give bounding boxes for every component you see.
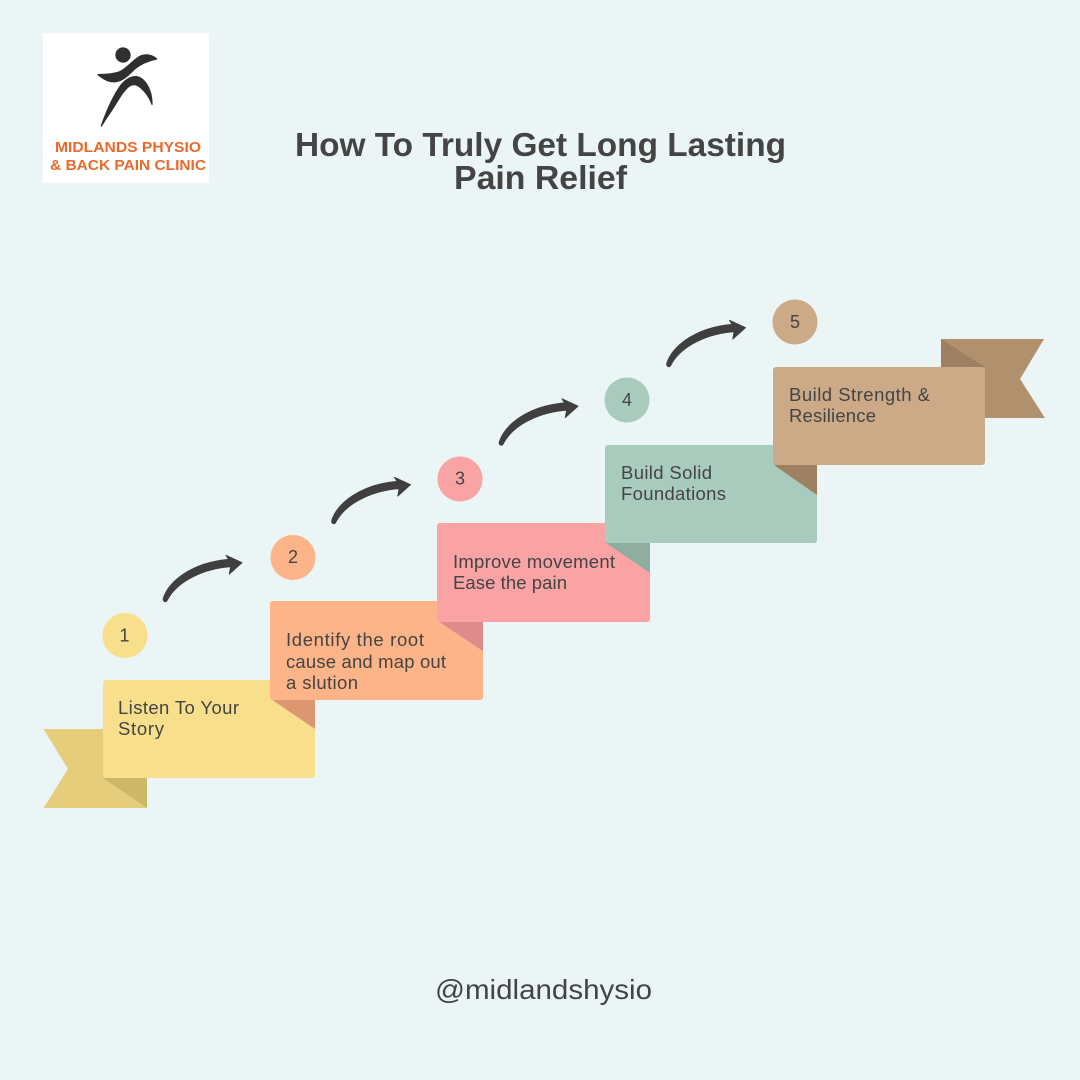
- number badge 1: 1: [119, 626, 130, 646]
- number badge 4: 4: [622, 390, 632, 410]
- number badge 4: [604, 378, 650, 422]
- title: Pain Relief: [454, 160, 628, 197]
- step 4: [604, 378, 817, 573]
- card 5: Resilience: [789, 405, 876, 426]
- card 5: [773, 367, 985, 465]
- logo text: MIDLANDS PHYSIO: [55, 140, 201, 156]
- number badge 2: [270, 535, 316, 580]
- card 1: Listen To Your: [118, 697, 239, 718]
- title: [295, 127, 786, 197]
- step 3: [437, 456, 650, 651]
- fold 5: [774, 465, 817, 495]
- step 5: [772, 300, 985, 495]
- ribbon tail: left yellow: [44, 729, 147, 808]
- card 1: [103, 680, 315, 778]
- logo text: [50, 140, 207, 174]
- arrow 1 to 2: [163, 555, 242, 602]
- footer handle: @midlandshysio: [435, 974, 652, 1005]
- card 2: [270, 601, 483, 700]
- card 3: [437, 523, 650, 622]
- number badge 5: 5: [790, 312, 800, 332]
- arrow 2 to 3: [332, 477, 410, 524]
- title: How To Truly Get Long Lasting: [295, 127, 786, 164]
- card 4: [605, 445, 817, 543]
- number badge 5: [772, 300, 818, 344]
- icon: running figure: [98, 48, 157, 126]
- ribbon tail: right tan: [941, 339, 1045, 418]
- card 3: Ease the pain: [453, 572, 567, 593]
- arrow 3 to 4: [499, 399, 578, 445]
- card 2: cause and map out: [286, 651, 446, 672]
- card 3: Improve movement: [453, 551, 615, 572]
- card 2: a slution: [286, 672, 358, 693]
- card 2: Identify the root: [286, 629, 424, 650]
- card 4: Build Solid: [621, 462, 712, 483]
- number badge 2: 2: [288, 547, 298, 567]
- card 5: Build Strength &: [789, 384, 931, 405]
- logo: [43, 33, 209, 183]
- step 2: [270, 535, 483, 729]
- logo text: & BACK PAIN CLINIC: [50, 158, 207, 174]
- fold 4: [606, 543, 650, 573]
- card 1: Story: [118, 718, 165, 739]
- number badge 1: [102, 613, 148, 658]
- arrow 4 to 5: [667, 320, 745, 367]
- fold 2: [271, 699, 315, 729]
- number badge 3: 3: [455, 468, 465, 488]
- step 1: [102, 613, 315, 778]
- card 4: Foundations: [621, 483, 726, 504]
- number badge 3: [438, 456, 482, 502]
- fold 3: [438, 621, 483, 651]
